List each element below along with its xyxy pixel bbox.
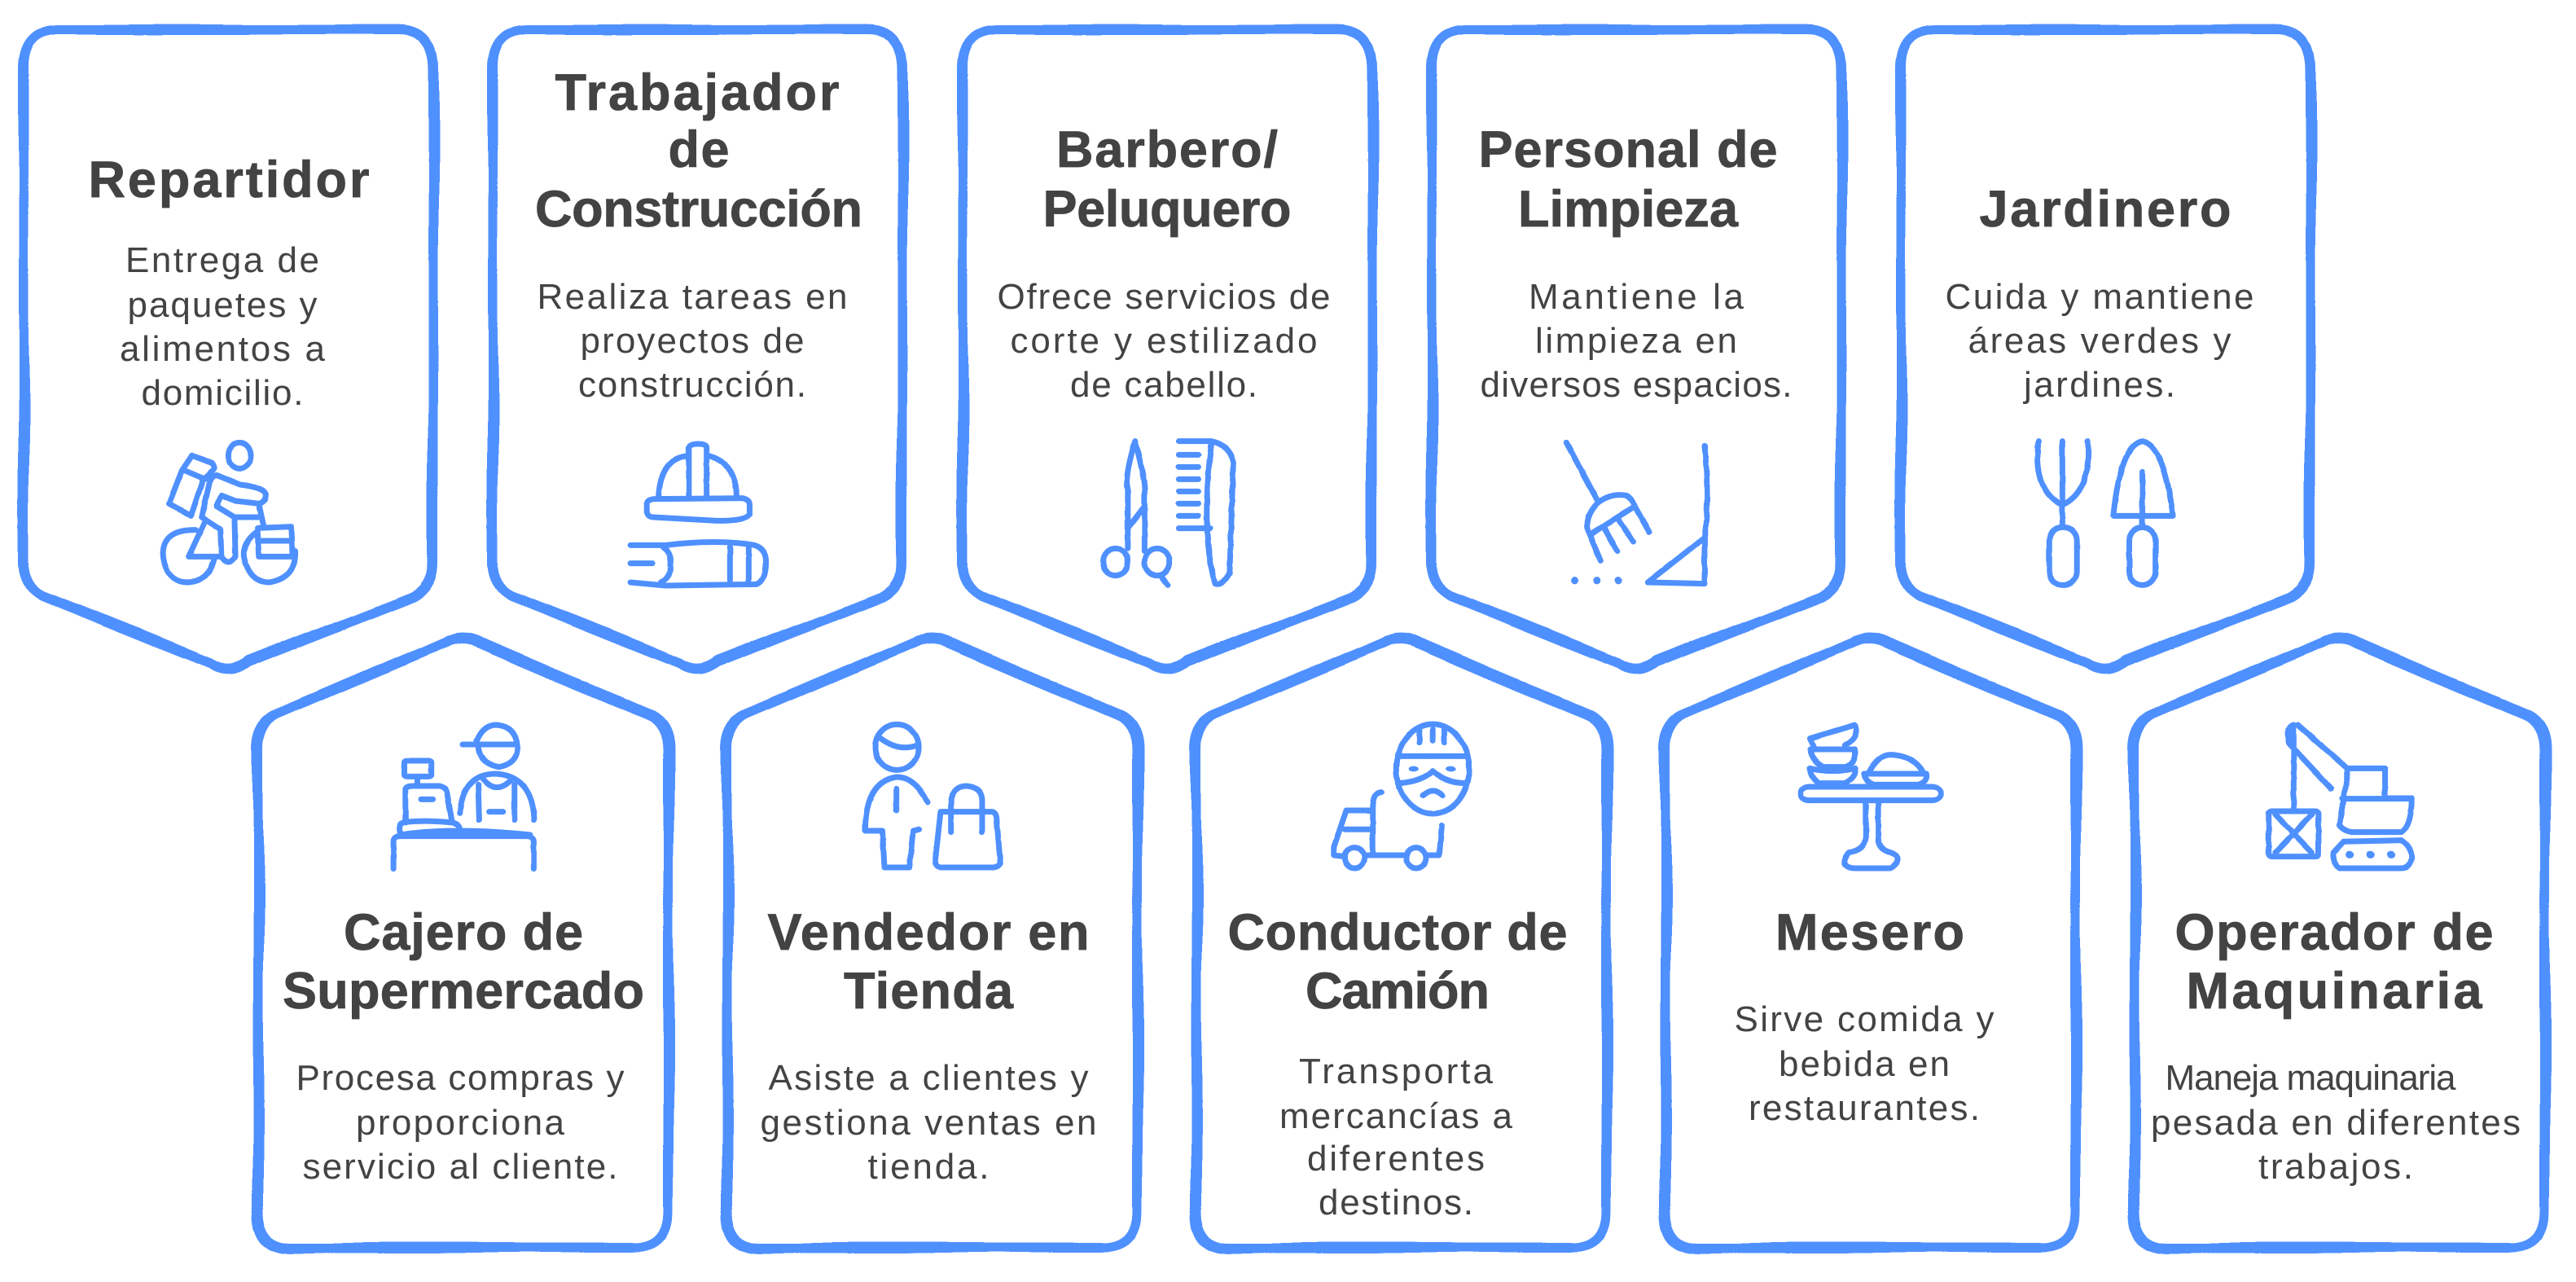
card: Cajero de Supermercado bbox=[258, 639, 668, 1249]
heading: Tienda bbox=[844, 963, 1014, 1020]
description: de cabello. bbox=[1070, 365, 1257, 405]
description: diferentes bbox=[1307, 1139, 1485, 1179]
card outline bbox=[493, 29, 902, 670]
icon: hard hat and tool bbox=[630, 444, 766, 586]
heading: Operador de bbox=[2174, 904, 2494, 961]
description bbox=[1735, 999, 1994, 1128]
heading: Peluquero bbox=[1042, 181, 1292, 238]
card outline bbox=[963, 29, 1372, 670]
description: Transporta bbox=[1299, 1052, 1494, 1091]
description: destinos. bbox=[1319, 1183, 1473, 1223]
icon: delivery cyclist bbox=[163, 442, 296, 582]
heading: Maquinaria bbox=[2186, 963, 2482, 1020]
card outline bbox=[1196, 639, 1606, 1249]
card: Jardinero bbox=[1901, 29, 2311, 670]
card outline bbox=[24, 29, 433, 670]
heading: Supermercado bbox=[283, 963, 644, 1020]
heading bbox=[2174, 904, 2494, 1020]
description: mercancías a bbox=[1279, 1096, 1513, 1136]
card outline bbox=[727, 639, 1137, 1249]
card: Barbero/Peluquero bbox=[963, 29, 1372, 670]
heading: de bbox=[668, 121, 730, 178]
description: Sirve comida y bbox=[1735, 999, 1994, 1039]
icon: crane excavator bbox=[2269, 725, 2411, 868]
description bbox=[997, 277, 1331, 405]
description bbox=[120, 240, 326, 413]
icon: truck driver and truck bbox=[1334, 724, 1469, 868]
description: proporciona bbox=[356, 1103, 565, 1143]
card: Vendedor en Tienda bbox=[727, 639, 1137, 1249]
heading bbox=[1228, 904, 1567, 1020]
heading: Repartidor bbox=[88, 151, 370, 209]
icon: scissors and comb bbox=[1103, 441, 1233, 585]
card: Repartidor bbox=[24, 29, 433, 670]
description: tienda. bbox=[868, 1147, 989, 1187]
heading: Personal de bbox=[1479, 121, 1777, 178]
card: Operador de Maquinaria bbox=[2135, 639, 2544, 1249]
icon: garden fork and trowel bbox=[2038, 441, 2173, 585]
description bbox=[1279, 1052, 1513, 1223]
heading: Conductor de bbox=[1228, 904, 1567, 961]
heading: Construcción bbox=[535, 181, 862, 238]
description: alimentos a bbox=[120, 329, 326, 369]
icon: broom and dustpan bbox=[1566, 442, 1707, 584]
heading: Camión bbox=[1306, 963, 1490, 1020]
card: Personal de Limpieza bbox=[1432, 29, 1841, 670]
description: diversos espacios. bbox=[1481, 365, 1792, 405]
heading: Vendedor en bbox=[767, 904, 1090, 961]
card outline bbox=[258, 639, 668, 1249]
description: restaurantes. bbox=[1749, 1088, 1980, 1128]
heading: Limpieza bbox=[1518, 181, 1739, 238]
icon: supermarket cashier bbox=[393, 725, 534, 869]
description: bebida en bbox=[1779, 1044, 1950, 1084]
heading bbox=[1042, 121, 1292, 238]
description: Asiste a clientes y bbox=[769, 1058, 1088, 1098]
card outline bbox=[1901, 29, 2311, 670]
description: domicilio. bbox=[142, 373, 303, 413]
heading: Cajero de bbox=[344, 904, 583, 961]
card outline bbox=[2135, 639, 2544, 1249]
description: Procesa compras y bbox=[296, 1058, 624, 1098]
description bbox=[2151, 1058, 2521, 1187]
heading bbox=[767, 904, 1090, 1020]
description: servicio al cliente. bbox=[303, 1147, 617, 1187]
description bbox=[761, 1058, 1096, 1187]
description: limpieza en bbox=[1535, 321, 1737, 361]
description: gestiona ventas en bbox=[761, 1103, 1096, 1143]
description: áreas verdes y bbox=[1968, 321, 2232, 361]
description: Maneja maquinaria bbox=[2165, 1058, 2456, 1098]
description: corte y estilizado bbox=[1010, 321, 1318, 361]
description bbox=[1481, 277, 1792, 405]
description: trabajos. bbox=[2258, 1147, 2413, 1187]
description: Entrega de bbox=[125, 240, 319, 280]
heading bbox=[1479, 121, 1777, 238]
icon: table with dishes bbox=[1801, 725, 1941, 868]
icon: salesperson with shopping bag bbox=[865, 724, 1000, 867]
description: Realiza tareas en bbox=[538, 277, 847, 317]
description: construcción. bbox=[578, 365, 806, 405]
heading bbox=[283, 904, 644, 1020]
description bbox=[296, 1058, 624, 1187]
heading: Jardinero bbox=[1979, 181, 2232, 238]
heading: Trabajador bbox=[555, 64, 839, 121]
card outline bbox=[1665, 639, 2075, 1249]
description: proyectos de bbox=[580, 321, 805, 361]
heading: Mesero bbox=[1775, 904, 1964, 961]
card: Mesero bbox=[1665, 639, 2075, 1249]
heading: Barbero/ bbox=[1056, 121, 1278, 178]
heading bbox=[535, 64, 862, 238]
description: pesada en diferentes bbox=[2151, 1103, 2521, 1143]
description: Mantiene la bbox=[1529, 277, 1744, 317]
card: Trabajador de Construcción bbox=[493, 29, 902, 670]
description: jardines. bbox=[2022, 365, 2175, 405]
description: Cuida y mantiene bbox=[1945, 277, 2254, 317]
description bbox=[1945, 277, 2254, 405]
card: Conductor de Camión bbox=[1196, 639, 1606, 1249]
description: Ofrece servicios de bbox=[997, 277, 1331, 317]
description: paquetes y bbox=[127, 285, 318, 325]
description bbox=[538, 277, 847, 405]
card outline bbox=[1432, 29, 1841, 670]
